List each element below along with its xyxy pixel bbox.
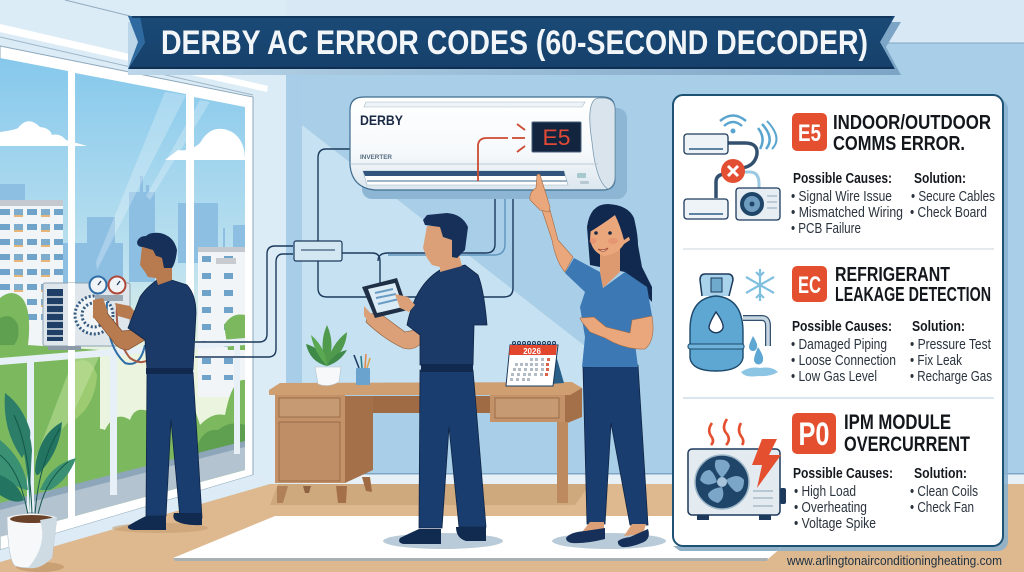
possible causes: P0: • Voltage Spike (794, 516, 876, 532)
solution: E5: Solution: (914, 171, 966, 187)
legs (419, 370, 486, 528)
air vent (363, 171, 568, 185)
desk calendar 2026 (506, 342, 564, 386)
shoes (128, 513, 202, 530)
possible causes: EC (791, 319, 896, 385)
solution: P0: Solution: (914, 466, 967, 482)
lower arm (580, 316, 653, 349)
icon: overheating outdoor unit (688, 419, 786, 520)
possible causes: E5: • Mismatched Wiring (791, 205, 903, 221)
badge: E5: E5 (798, 120, 821, 147)
woman pointing at AC (530, 174, 666, 549)
desk calendar 2026: 2026 (523, 347, 541, 356)
solution: P0: • Clean Coils (910, 484, 978, 500)
trees (0, 293, 245, 520)
section: EC refrigerant leakage (688, 263, 992, 385)
solution: EC: • Pressure Test (910, 337, 991, 353)
shadow (552, 533, 666, 549)
possible causes: EC: Possible Causes: (792, 319, 892, 335)
error display E5: E5 (542, 125, 570, 150)
outdoor AC condenser unit (43, 283, 130, 350)
possible causes: P0 (793, 466, 893, 532)
possible causes: EC: • Damaged Piping (791, 337, 887, 353)
legs (146, 372, 202, 518)
possible causes: E5: Possible Causes: (793, 171, 892, 187)
possible causes: EC: • Loose Connection (791, 353, 896, 369)
solution: P0 (910, 466, 978, 516)
solution: E5 (910, 171, 995, 221)
website footer: www.arlingtonairconditioningheating.com (786, 553, 1002, 568)
gauges (90, 276, 126, 301)
floor shadow (112, 523, 208, 533)
desk (269, 382, 582, 503)
raised arm (542, 210, 573, 272)
solution: P0: • Check Fan (910, 500, 974, 516)
error display E5 (532, 122, 581, 152)
badge: P0: P0 (798, 416, 830, 452)
solution: E5: • Secure Cables (911, 189, 995, 205)
hand (93, 298, 108, 320)
possible causes: E5 (791, 171, 903, 237)
neck (600, 248, 620, 288)
technician at outdoor unit (90, 233, 208, 533)
solution: EC: Solution: (912, 319, 965, 335)
arm (366, 312, 424, 349)
potted floor plant (0, 393, 76, 572)
title text: DERBY AC ERROR CODES (60-SECOND DECODER) (161, 24, 868, 62)
hoses (107, 302, 148, 364)
distant skyline (0, 176, 245, 282)
heading: EC (835, 263, 991, 306)
legs (583, 365, 648, 525)
possible causes: EC: • Low Gas Level (791, 369, 877, 385)
badge: EC: EC (798, 272, 821, 299)
shirt (407, 265, 487, 365)
feet and shoes (582, 522, 646, 536)
possible causes: E5: • Signal Wire Issue (791, 189, 892, 205)
head (140, 245, 172, 285)
shirt (128, 277, 196, 370)
window mullions (68, 71, 194, 518)
window with outdoor city view (0, 46, 270, 562)
technician with tablet (362, 213, 503, 549)
clouds (0, 121, 245, 160)
heading: P0: IPM MODULE (844, 411, 951, 434)
heading: E5: COMMS ERROR. (833, 132, 965, 155)
heading: E5 (833, 111, 991, 155)
badge: EC (792, 266, 827, 302)
badge: E5 (792, 113, 827, 151)
shoes (399, 527, 486, 544)
brand label: DERBY (360, 112, 404, 128)
solution: EC (910, 319, 992, 385)
potted plant on desk (306, 325, 347, 386)
possible causes: P0: Possible Causes: (793, 466, 893, 482)
shadow (383, 533, 503, 549)
possible causes: P0: • Overheating (794, 500, 867, 516)
hands (364, 294, 415, 325)
white floor rug (173, 516, 900, 561)
heading: P0: OVERCURRENT (844, 433, 970, 456)
indoor AC unit (350, 97, 627, 199)
arm (93, 308, 145, 350)
panel: error code decoder (673, 95, 1008, 551)
possible causes: E5: • PCB Failure (791, 221, 861, 237)
face (590, 214, 630, 256)
balcony rail and posts (0, 338, 245, 512)
balcony low wall (0, 445, 245, 537)
pointing hand (530, 174, 550, 212)
solution: EC: • Fix Leak (910, 353, 963, 369)
icon: comms error (684, 116, 780, 220)
shirt (565, 258, 652, 367)
solution: EC: • Recharge Gas (910, 369, 992, 385)
callout arrow to display (478, 124, 525, 181)
section: E5 comms error (684, 111, 995, 237)
balcony glass reflection (35, 355, 100, 460)
right apartment building (198, 247, 245, 397)
pencil cup (354, 354, 370, 385)
tablet (362, 278, 408, 318)
wiring lines (195, 149, 513, 357)
heading: P0 (844, 411, 970, 456)
hair back (587, 204, 652, 302)
junction box (294, 241, 342, 261)
possible causes: P0: • High Load (794, 484, 856, 500)
head (423, 226, 462, 272)
title banner (128, 16, 901, 75)
left apartment building (0, 200, 63, 346)
inverter label: INVERTER (360, 154, 392, 161)
icon: refrigerant leak (688, 269, 778, 376)
heading: E5: INDOOR/OUTDOOR (833, 111, 991, 134)
section: P0 IPM overcurrent (688, 411, 978, 532)
heading: EC: REFRIGERANT (835, 263, 950, 286)
solution: E5: • Check Board (910, 205, 987, 221)
